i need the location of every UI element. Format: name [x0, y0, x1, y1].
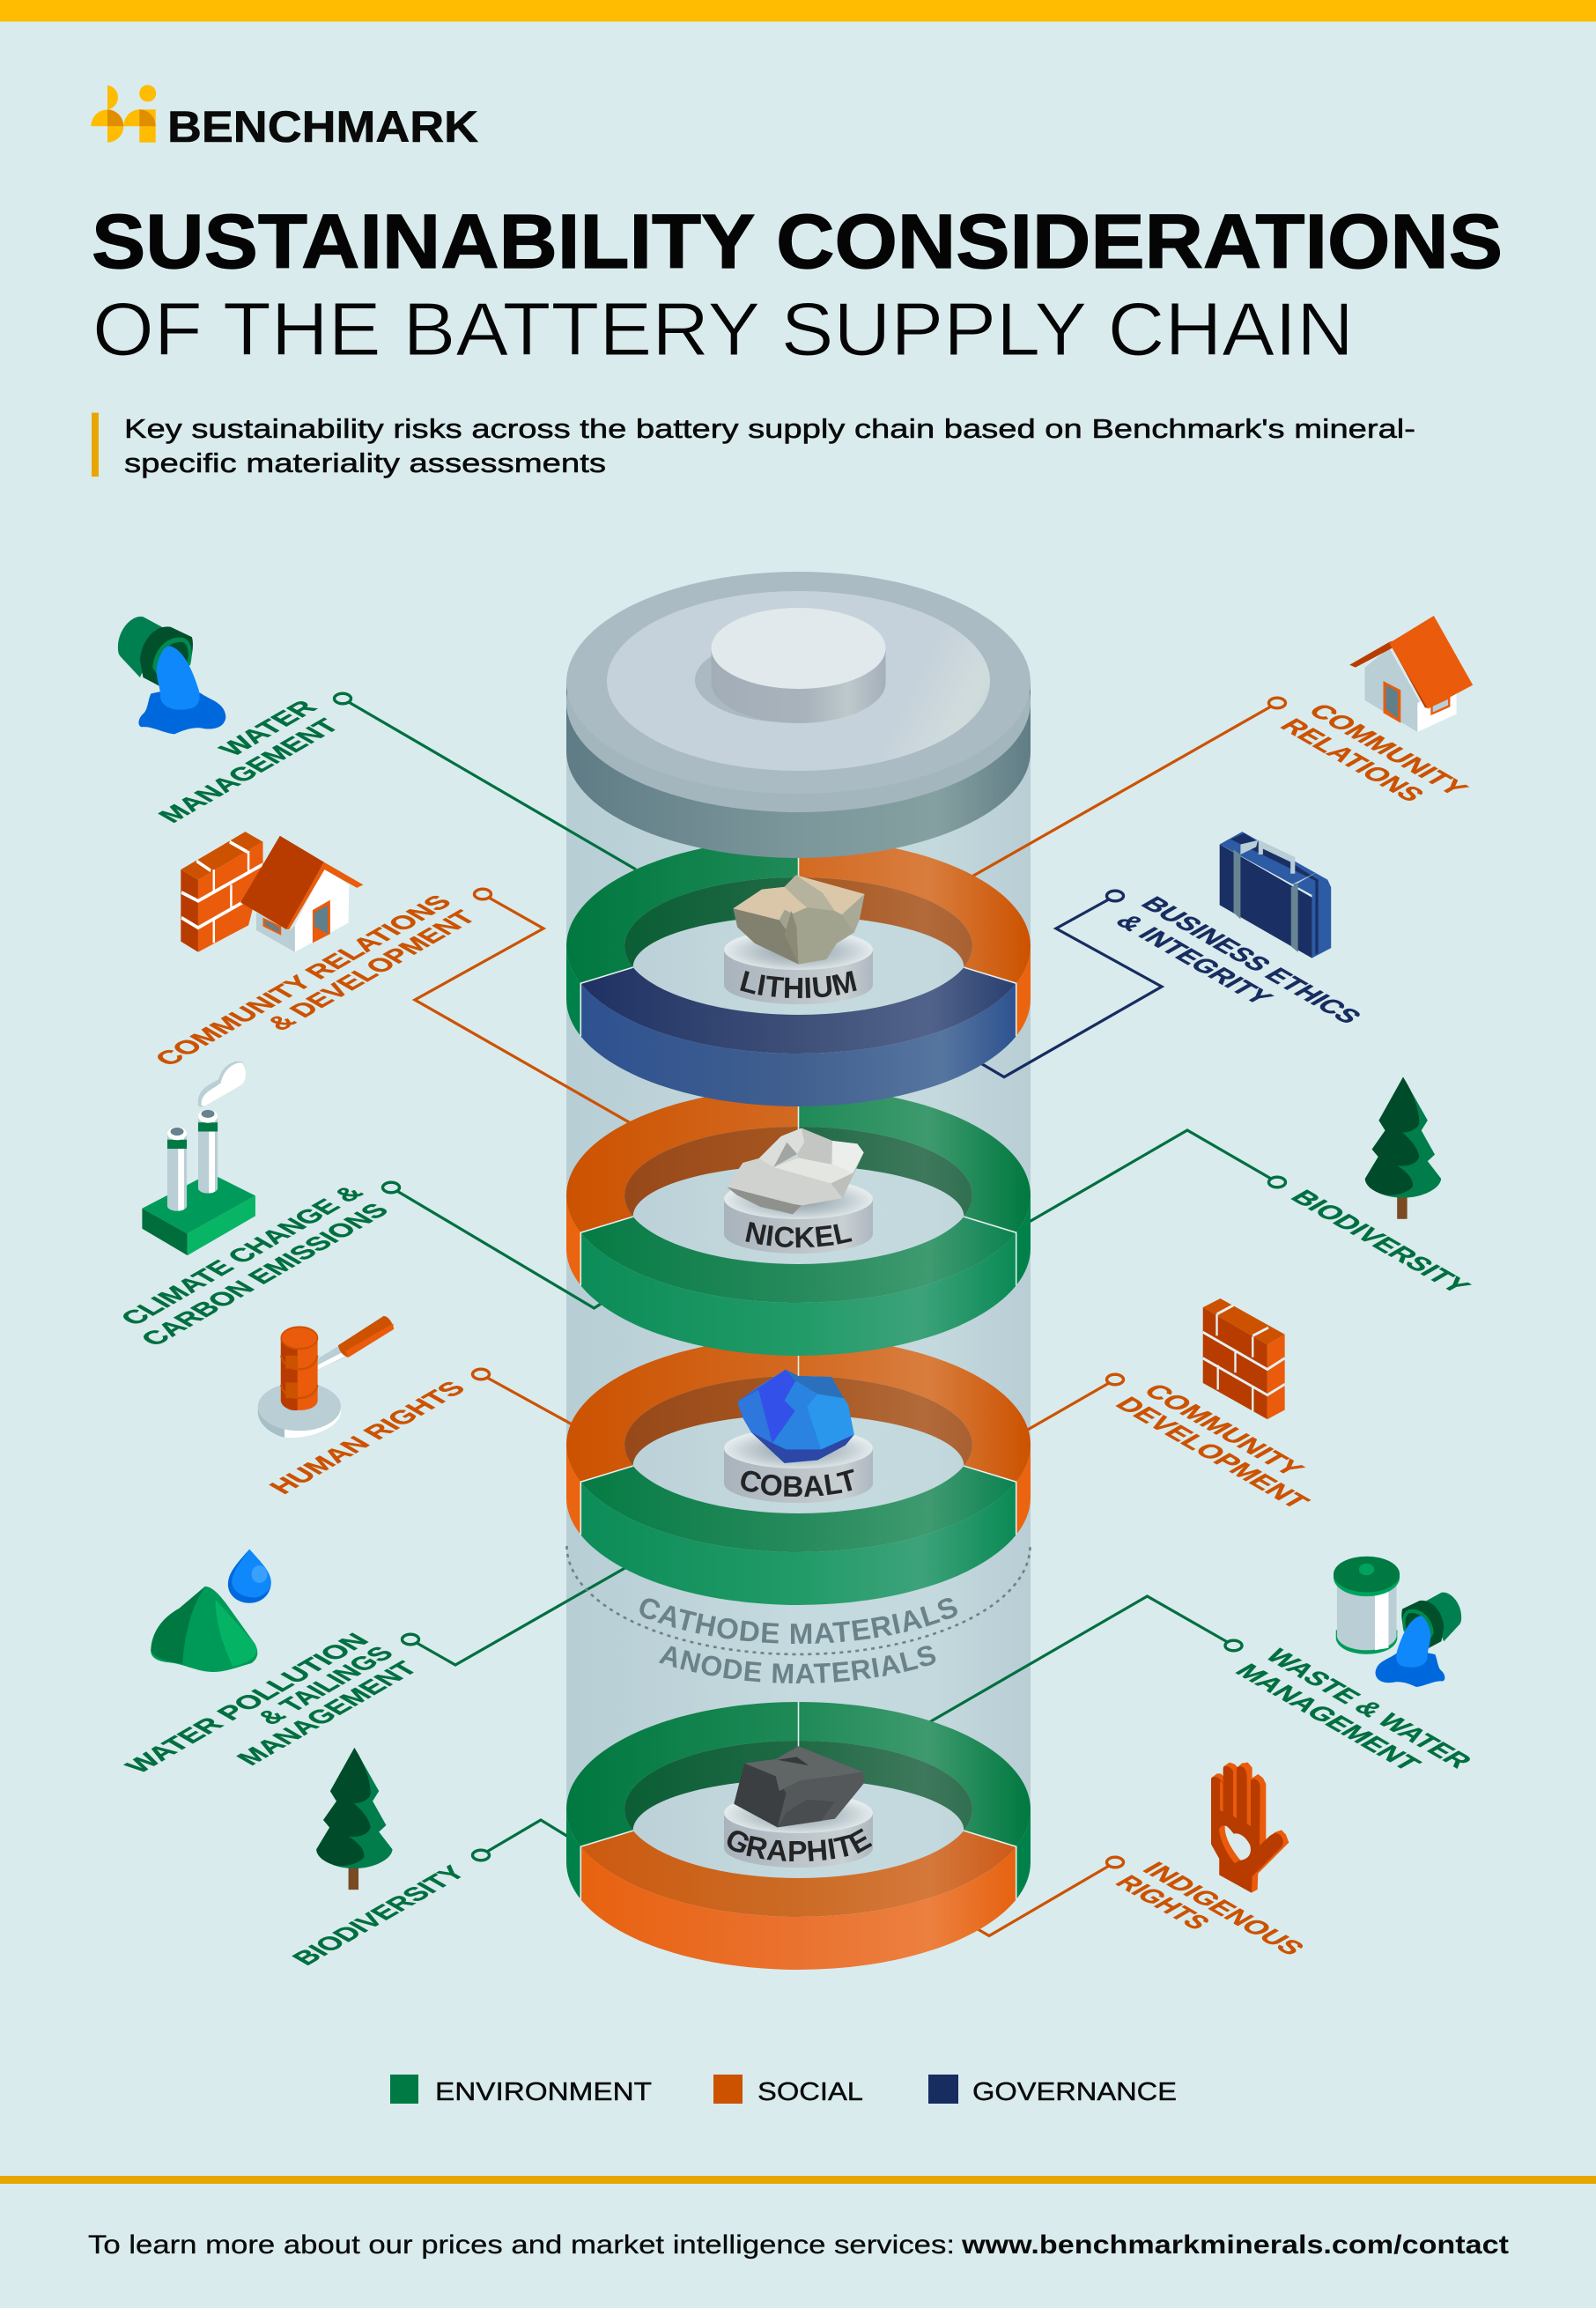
icon: tailings pile and water drop — [151, 1550, 271, 1672]
connector: water management — [335, 693, 636, 869]
label: human rights: HUMAN RIGHTS — [263, 1377, 472, 1498]
battery body — [566, 683, 1031, 1863]
legend: SOCIAL — [757, 2078, 863, 2106]
connector: indigenous rights — [969, 1857, 1124, 1936]
label: community relations right: RELATIONS — [1274, 714, 1430, 806]
ring: cobalt — [566, 1346, 1031, 1605]
rock: lithium — [733, 875, 865, 965]
label: water management: MANAGEMENT — [152, 714, 346, 827]
icon: briefcase — [1220, 832, 1331, 958]
battery cap — [566, 572, 1031, 858]
footer call to action: www.benchmarkminerals.com/contact — [961, 2230, 1509, 2260]
connector: community development — [1026, 1374, 1124, 1431]
connector: climate change and carbon emissions — [382, 1182, 608, 1308]
icon: tree left — [316, 1748, 393, 1890]
icon: factory chimneys — [142, 1062, 255, 1255]
icon: water pipe right — [1376, 1593, 1461, 1687]
label: community development: COMMUNITY — [1137, 1380, 1311, 1480]
connector: community relations and development — [415, 889, 631, 1123]
legend — [390, 2075, 1177, 2106]
icon: water pipe — [118, 617, 225, 734]
connector: waste and water management — [925, 1596, 1242, 1725]
connector: biodiversity left — [472, 1820, 573, 1860]
pedestal: lithium: LITHIUM — [740, 971, 857, 999]
connector: biodiversity right — [1026, 1130, 1286, 1224]
logo: Benchmark: BENCHMARK — [167, 102, 478, 152]
footer call to action: To learn more about our prices and market intelligence services: — [88, 2230, 955, 2260]
label: climate change and carbon emissions: CARBON EMISSIONS — [135, 1199, 395, 1350]
label: community development: DEVELOPMENT — [1109, 1393, 1316, 1513]
label: indigenous rights: RIGHTS — [1109, 1871, 1216, 1934]
ring: lithium — [566, 848, 1031, 1106]
icon: brick wall and house — [181, 832, 363, 952]
label: business ethics and integrity: BUSINESS ETHICS — [1134, 892, 1368, 1028]
top accent bar — [0, 0, 1596, 21]
label: climate change and carbon emissions: CLIMATE CHANGE & — [115, 1181, 370, 1329]
ring: graphite — [566, 1702, 1031, 1970]
label: waste and water management: MANAGEMENT — [1229, 1660, 1427, 1775]
icon: hand with heart — [1211, 1763, 1289, 1893]
divider: cathode and anode materials: CATHODE MATERIALS — [639, 1598, 957, 1644]
label: biodiversity right: BIODIVERSITY — [1284, 1186, 1476, 1298]
icon: waste drum — [1334, 1557, 1400, 1654]
pedestal: cobalt: COBALT — [741, 1469, 854, 1498]
label: water pollution and tailings management: MANAGEMENT — [231, 1657, 425, 1770]
connector: community relations right — [969, 698, 1286, 878]
label: waste and water management: WASTE & WATER — [1259, 1645, 1478, 1772]
legend: ENVIRONMENT — [435, 2078, 652, 2106]
footer divider bar — [0, 2176, 1596, 2184]
divider: cathode and anode materials — [565, 1546, 1031, 1683]
title — [92, 199, 1503, 372]
pedestal: cobalt — [724, 1432, 873, 1503]
icon: tree right — [1365, 1077, 1441, 1219]
rock: graphite — [734, 1746, 865, 1827]
label: biodiversity left: BIODIVERSITY — [286, 1861, 472, 1970]
connector: business ethics and integrity — [973, 891, 1162, 1077]
title: SUSTAINABILITY CONSIDERATIONS — [92, 199, 1503, 285]
legend: GOVERNANCE — [972, 2078, 1177, 2106]
subtitle with accent bar: specific materiality assessments — [124, 448, 606, 478]
pedestal: graphite: GRAPHITE — [728, 1828, 872, 1861]
connector: human rights — [472, 1369, 577, 1427]
icon: house right — [1349, 616, 1473, 732]
pedestal: graphite — [724, 1799, 873, 1868]
ring: nickel — [566, 1098, 1031, 1356]
label: water pollution and tailings management: & TAILINGS — [251, 1642, 400, 1729]
divider: cathode and anode materials: ANODE MATERIALS — [659, 1646, 935, 1683]
label: community relations right: COMMUNITY — [1302, 699, 1474, 800]
label: water management: WATER — [213, 696, 323, 760]
label: community relations and development: COMMUNITY RELATIONS — [149, 891, 458, 1070]
connector: water pollution and tailings — [402, 1563, 634, 1665]
subtitle with accent bar — [92, 412, 1415, 478]
rock: cobalt — [737, 1370, 854, 1463]
footer call to action — [88, 2230, 1509, 2260]
pedestal: nickel — [724, 1184, 873, 1254]
label: water pollution and tailings management: WATER POLLUTION — [119, 1629, 375, 1778]
icon: gavel — [258, 1316, 394, 1438]
label: indigenous rights: INDIGENOUS — [1136, 1858, 1311, 1959]
rock: nickel — [727, 1128, 864, 1214]
pedestal: lithium — [724, 936, 873, 1004]
label: business ethics and integrity: & INTEGRITY — [1109, 910, 1279, 1009]
title: OF THE BATTERY SUPPLY CHAIN — [92, 288, 1354, 372]
subtitle with accent bar: Key sustainability risks across the battery supply chain based on Benchmark's mineral- — [124, 413, 1415, 444]
pedestal: nickel: NICKEL — [745, 1222, 853, 1247]
logo: Benchmark — [91, 85, 478, 152]
label: community relations and development: & DEVELOPMENT — [261, 906, 483, 1035]
icon: brick wall right — [1203, 1298, 1285, 1419]
